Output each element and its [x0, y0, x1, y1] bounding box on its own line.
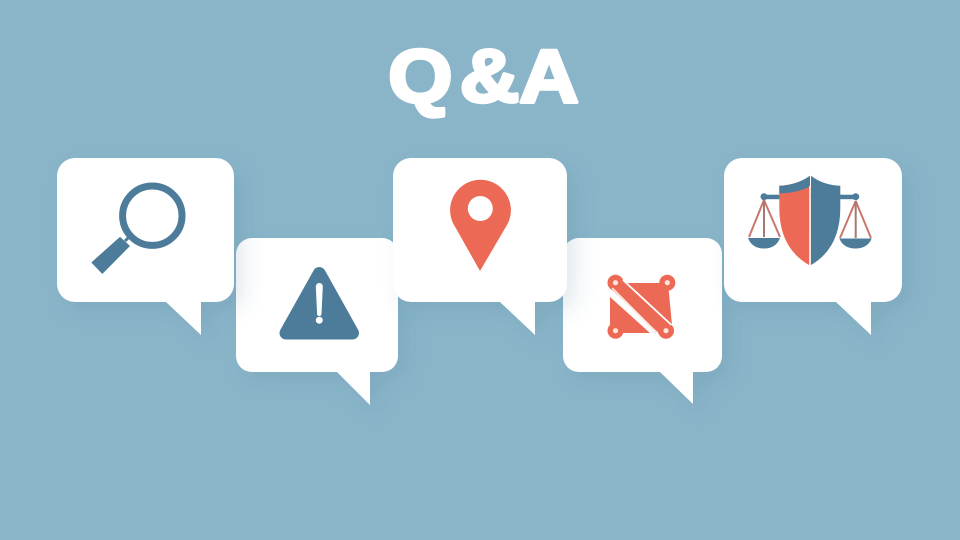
- shield: [779, 176, 840, 265]
- icon: warning triangle: [286, 274, 352, 333]
- scale beam: [760, 193, 859, 200]
- panel: warning speech bubble: [236, 238, 398, 405]
- icon: shield and scales: [748, 176, 872, 265]
- panel: location speech bubble: [393, 158, 567, 335]
- left scale pan: [748, 200, 780, 248]
- bubble shape: [393, 158, 567, 335]
- icon: magnifying glass: [92, 186, 182, 273]
- icon: connected square: [608, 275, 675, 339]
- panel: search speech bubble: [57, 158, 234, 335]
- bubble shape: [724, 158, 902, 335]
- panel: justice speech bubble: [724, 158, 902, 335]
- bubble shape: [57, 158, 234, 335]
- bubble shape: [563, 238, 722, 404]
- icon: location pin: [450, 180, 511, 271]
- title: Q&A: Q&A: [388, 34, 579, 118]
- panel: route speech bubble: [563, 238, 722, 404]
- right scale pan: [839, 201, 872, 248]
- bubble shape: [236, 238, 398, 405]
